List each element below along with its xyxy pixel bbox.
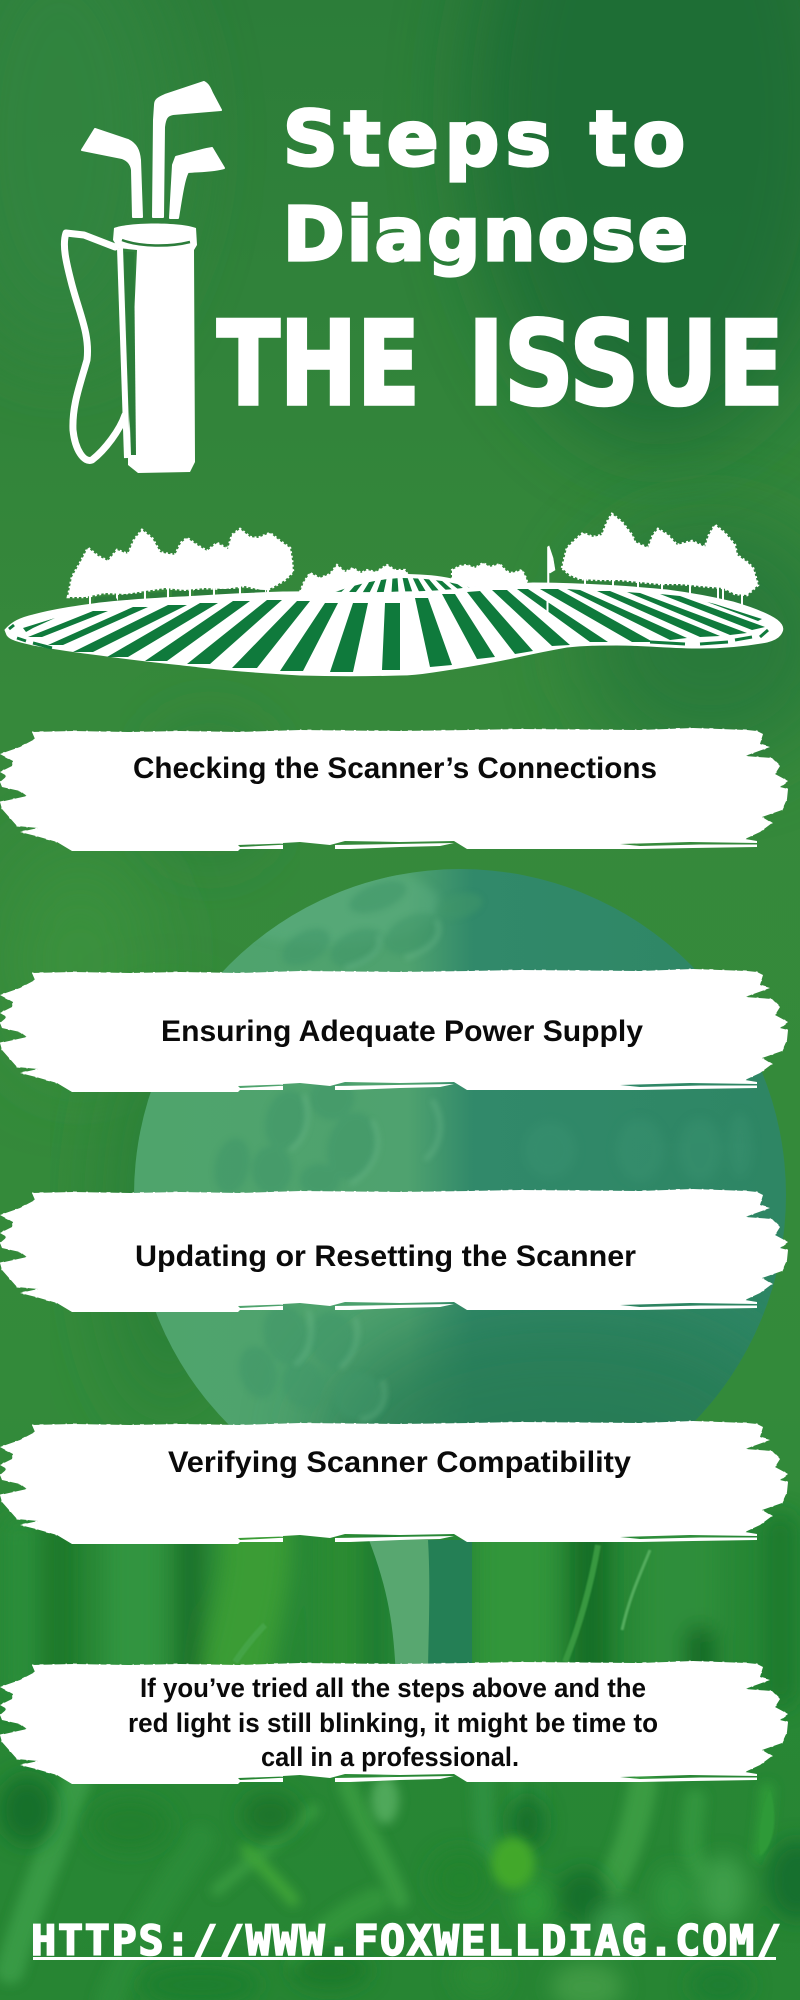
golf tee [369, 1540, 472, 1824]
golf course illustration [5, 514, 783, 676]
text: closing advice: call in a professional. [261, 1742, 519, 1772]
icon: striped fairway [5, 583, 783, 676]
dark and light patches [0, 1776, 55, 1844]
icon: bag strap [64, 233, 125, 460]
icon: centre club [153, 82, 221, 217]
golf ball [134, 869, 786, 1425]
golf bag with clubs icon [64, 82, 224, 473]
text: step 2 label: Ensuring Adequate Power Supply [161, 1015, 644, 1048]
panel: step 3 [0, 1189, 788, 1312]
icon: back mound stripes [336, 574, 476, 592]
panel: step 1 [0, 728, 788, 851]
panel: step 4 [0, 1421, 788, 1544]
text: closing advice: red light is still blinking, it might be time to [128, 1708, 658, 1738]
icon: right club [170, 148, 224, 218]
text: step 3 label: Updating or Resetting the Scanner [135, 1240, 637, 1273]
text: closing advice [128, 1673, 658, 1772]
panel: step 2 [0, 969, 788, 1092]
icon: flag [548, 546, 555, 612]
title line: Diagnose: Diagnose [283, 192, 688, 278]
title [217, 94, 784, 432]
grass foreground [0, 1480, 800, 2000]
text: step 1 label: Checking the Scanner’s Connections [133, 752, 657, 785]
icon: left club [82, 129, 142, 217]
panel: closing advice [0, 1661, 788, 1784]
icon: centre tree line [300, 563, 528, 594]
title line: THE ISSUE [217, 297, 784, 432]
icon: right tree line [562, 514, 758, 606]
icon: left tree line [68, 529, 293, 606]
title line: THE ISSUE: THE [217, 297, 420, 432]
text: closing advice: If you’ve tried all the steps above and the [140, 1673, 646, 1703]
icon: bag body [113, 224, 197, 473]
text: step 4 label: Verifying Scanner Compatibility [168, 1446, 632, 1479]
title line: Steps to: Steps to [283, 94, 685, 183]
website link: HTTPS://WWW.FOXWELLDIAG.COM/ [31, 1916, 781, 1965]
